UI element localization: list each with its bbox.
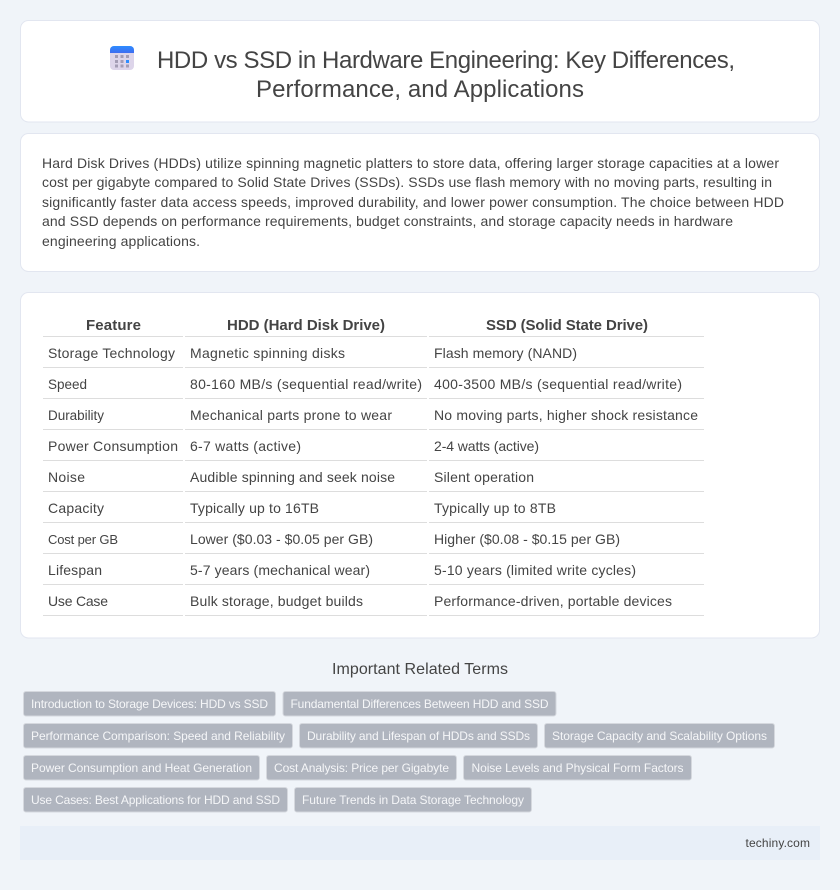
row: noise: Noise bbox=[48, 469, 85, 485]
row: noise bbox=[48, 469, 534, 485]
row: use case: Performance-driven, portable devices bbox=[434, 593, 672, 609]
row: capacity: Typically up to 16TB bbox=[190, 500, 319, 516]
header panel bbox=[20, 20, 820, 122]
tag bbox=[24, 692, 276, 716]
row: storage technology bbox=[48, 345, 577, 361]
footer source text: techiny.com bbox=[746, 836, 810, 850]
row: power consumption: Power Consumption bbox=[48, 438, 178, 454]
intro text block: Hard Disk Drives (HDDs) utilize spinning magnetic platters to store data, offering larger storage capacities at a lower bbox=[42, 155, 779, 171]
heading: related terms: Important Related Terms bbox=[332, 661, 508, 678]
intro text block bbox=[42, 155, 784, 249]
row: durability: Durability bbox=[48, 408, 104, 423]
title bbox=[157, 47, 735, 103]
tag bbox=[24, 724, 292, 748]
tag: Fundamental Differences Between HDD and SSD bbox=[290, 697, 549, 711]
table header row: Feature bbox=[86, 317, 141, 334]
row: power consumption bbox=[48, 438, 539, 454]
row: lifespan: 5-10 years (limited write cycles) bbox=[434, 562, 636, 578]
tag: Cost Analysis: Price per Gigabyte bbox=[274, 761, 449, 775]
title: Performance, and Applications bbox=[256, 76, 584, 103]
tag bbox=[283, 692, 556, 716]
tag bbox=[266, 756, 456, 780]
row: durability bbox=[48, 407, 698, 423]
row: noise: Audible spinning and seek noise bbox=[190, 469, 395, 485]
row: use case: Bulk storage, budget builds bbox=[190, 593, 363, 609]
table header row: HDD (Hard Disk Drive) bbox=[227, 317, 385, 334]
row: cost per GB: Lower ($0.03 - $0.05 per GB) bbox=[190, 531, 373, 547]
row: noise: Silent operation bbox=[434, 469, 534, 485]
table header row: SSD (Solid State Drive) bbox=[486, 317, 648, 334]
icon: calendar bbox=[110, 46, 134, 70]
row: storage technology: Storage Technology bbox=[48, 345, 175, 361]
row: speed: 400-3500 MB/s (sequential read/write) bbox=[434, 376, 682, 392]
row: cost per GB: Cost per GB bbox=[48, 532, 118, 547]
tag bbox=[300, 724, 538, 748]
tag bbox=[24, 788, 288, 812]
tag bbox=[24, 756, 260, 780]
row: durability: No moving parts, higher shock resistance bbox=[434, 407, 698, 423]
intro text block: cost per gigabyte compared to Solid State Drives (SSDs). SSDs use flash memory with no moving parts, resulting in bbox=[42, 174, 772, 190]
table header row bbox=[86, 317, 648, 334]
tag bbox=[544, 724, 774, 748]
row: capacity bbox=[48, 500, 556, 516]
row: use case bbox=[48, 593, 672, 609]
row: cost per GB bbox=[48, 531, 620, 547]
tag: Introduction to Storage Devices: HDD vs SSD bbox=[31, 697, 268, 711]
row: storage technology: Magnetic spinning disks bbox=[190, 345, 345, 361]
row: power consumption: 6-7 watts (active) bbox=[190, 438, 301, 454]
row: speed: Speed bbox=[48, 377, 87, 392]
tag: Performance Comparison: Speed and Reliability bbox=[31, 729, 285, 743]
row: durability: Mechanical parts prone to wear bbox=[190, 407, 392, 423]
tag bbox=[294, 788, 532, 812]
row: use case: Use Case bbox=[48, 593, 108, 609]
row: speed: 80-160 MB/s (sequential read/write) bbox=[190, 376, 422, 392]
row: storage technology: Flash memory (NAND) bbox=[434, 345, 577, 361]
row: speed bbox=[48, 376, 682, 392]
row: lifespan: Lifespan bbox=[48, 562, 102, 578]
tag: Future Trends in Data Storage Technology bbox=[302, 793, 524, 807]
row: capacity: Typically up to 8TB bbox=[434, 500, 556, 516]
tag: Noise Levels and Physical Form Factors bbox=[472, 761, 684, 775]
row: lifespan: 5-7 years (mechanical wear) bbox=[190, 562, 370, 578]
intro text block: and SSD depends on performance requirements, budget constraints, and storage capacity needs in hardware bbox=[42, 213, 733, 229]
row: cost per GB: Higher ($0.08 - $0.15 per GB) bbox=[434, 531, 620, 547]
panel: introduction bbox=[20, 134, 820, 272]
tag bbox=[464, 756, 692, 780]
tag: Durability and Lifespan of HDDs and SSDs bbox=[307, 729, 530, 743]
tag: Storage Capacity and Scalability Options bbox=[552, 729, 767, 743]
row: power consumption: 2-4 watts (active) bbox=[434, 438, 539, 454]
tag: Power Consumption and Heat Generation bbox=[31, 761, 252, 775]
related term tags bbox=[24, 692, 774, 812]
intro text block: engineering applications. bbox=[42, 233, 200, 249]
footer bbox=[20, 826, 820, 860]
intro text block: significantly faster data access speeds, improved durability, and lower power consumption. The choice between HDD bbox=[42, 194, 784, 210]
row: capacity: Capacity bbox=[48, 500, 104, 516]
tag: Use Cases: Best Applications for HDD and SSD bbox=[31, 793, 280, 807]
row: lifespan bbox=[48, 562, 636, 578]
panel: comparison table bbox=[20, 292, 820, 638]
title: HDD vs SSD in Hardware Engineering: Key Differences, bbox=[157, 47, 735, 74]
